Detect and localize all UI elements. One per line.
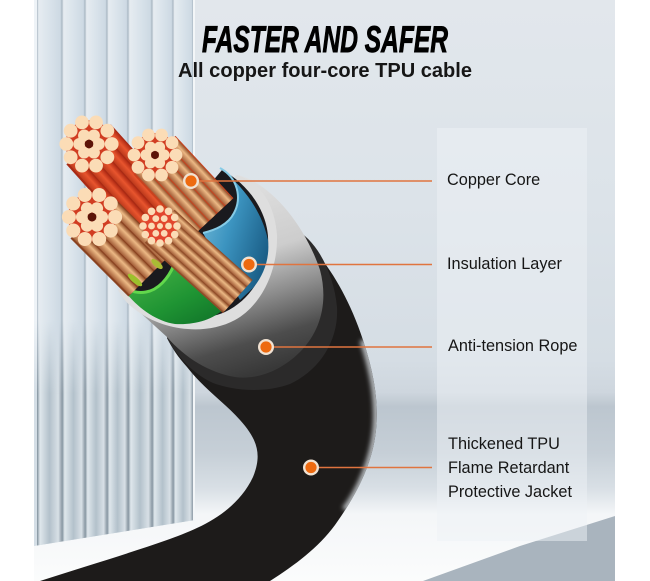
leader: protective jacket bbox=[303, 460, 432, 476]
sleeve opening ring bbox=[118, 175, 277, 329]
glass columns bbox=[34, 0, 195, 546]
green insulated core bbox=[110, 265, 224, 324]
leader: insulation layer bbox=[241, 256, 432, 272]
subtitle: All copper four-core TPU cable bbox=[178, 60, 472, 82]
copper bundle: top left bbox=[59, 115, 188, 250]
outer jacket bbox=[40, 228, 377, 581]
label: anti-tension rope: Anti-tension Rope bbox=[448, 337, 577, 355]
copper bundle: small bbox=[139, 205, 253, 313]
copper bundle: top right bbox=[128, 129, 233, 237]
label: jacket description: Protective Jacket bbox=[448, 483, 572, 501]
blue insulated core bbox=[203, 168, 268, 300]
leader: anti-tension rope bbox=[258, 339, 432, 355]
gray sleeve bbox=[123, 175, 323, 378]
label: jacket description: Flame Retardant bbox=[448, 459, 570, 477]
label: copper core: Copper Core bbox=[447, 171, 540, 189]
cable illustration bbox=[40, 115, 377, 581]
copper bundle: lower left bbox=[62, 188, 171, 297]
label: jacket description: Thickened TPU bbox=[448, 435, 560, 453]
collar bbox=[167, 228, 337, 390]
label: insulation layer: Insulation Layer bbox=[447, 255, 563, 273]
cable interior bbox=[122, 170, 268, 318]
leader: copper core bbox=[183, 173, 432, 189]
translucent label panel bbox=[437, 128, 587, 541]
title: FASTER AND SAFER bbox=[202, 19, 448, 60]
